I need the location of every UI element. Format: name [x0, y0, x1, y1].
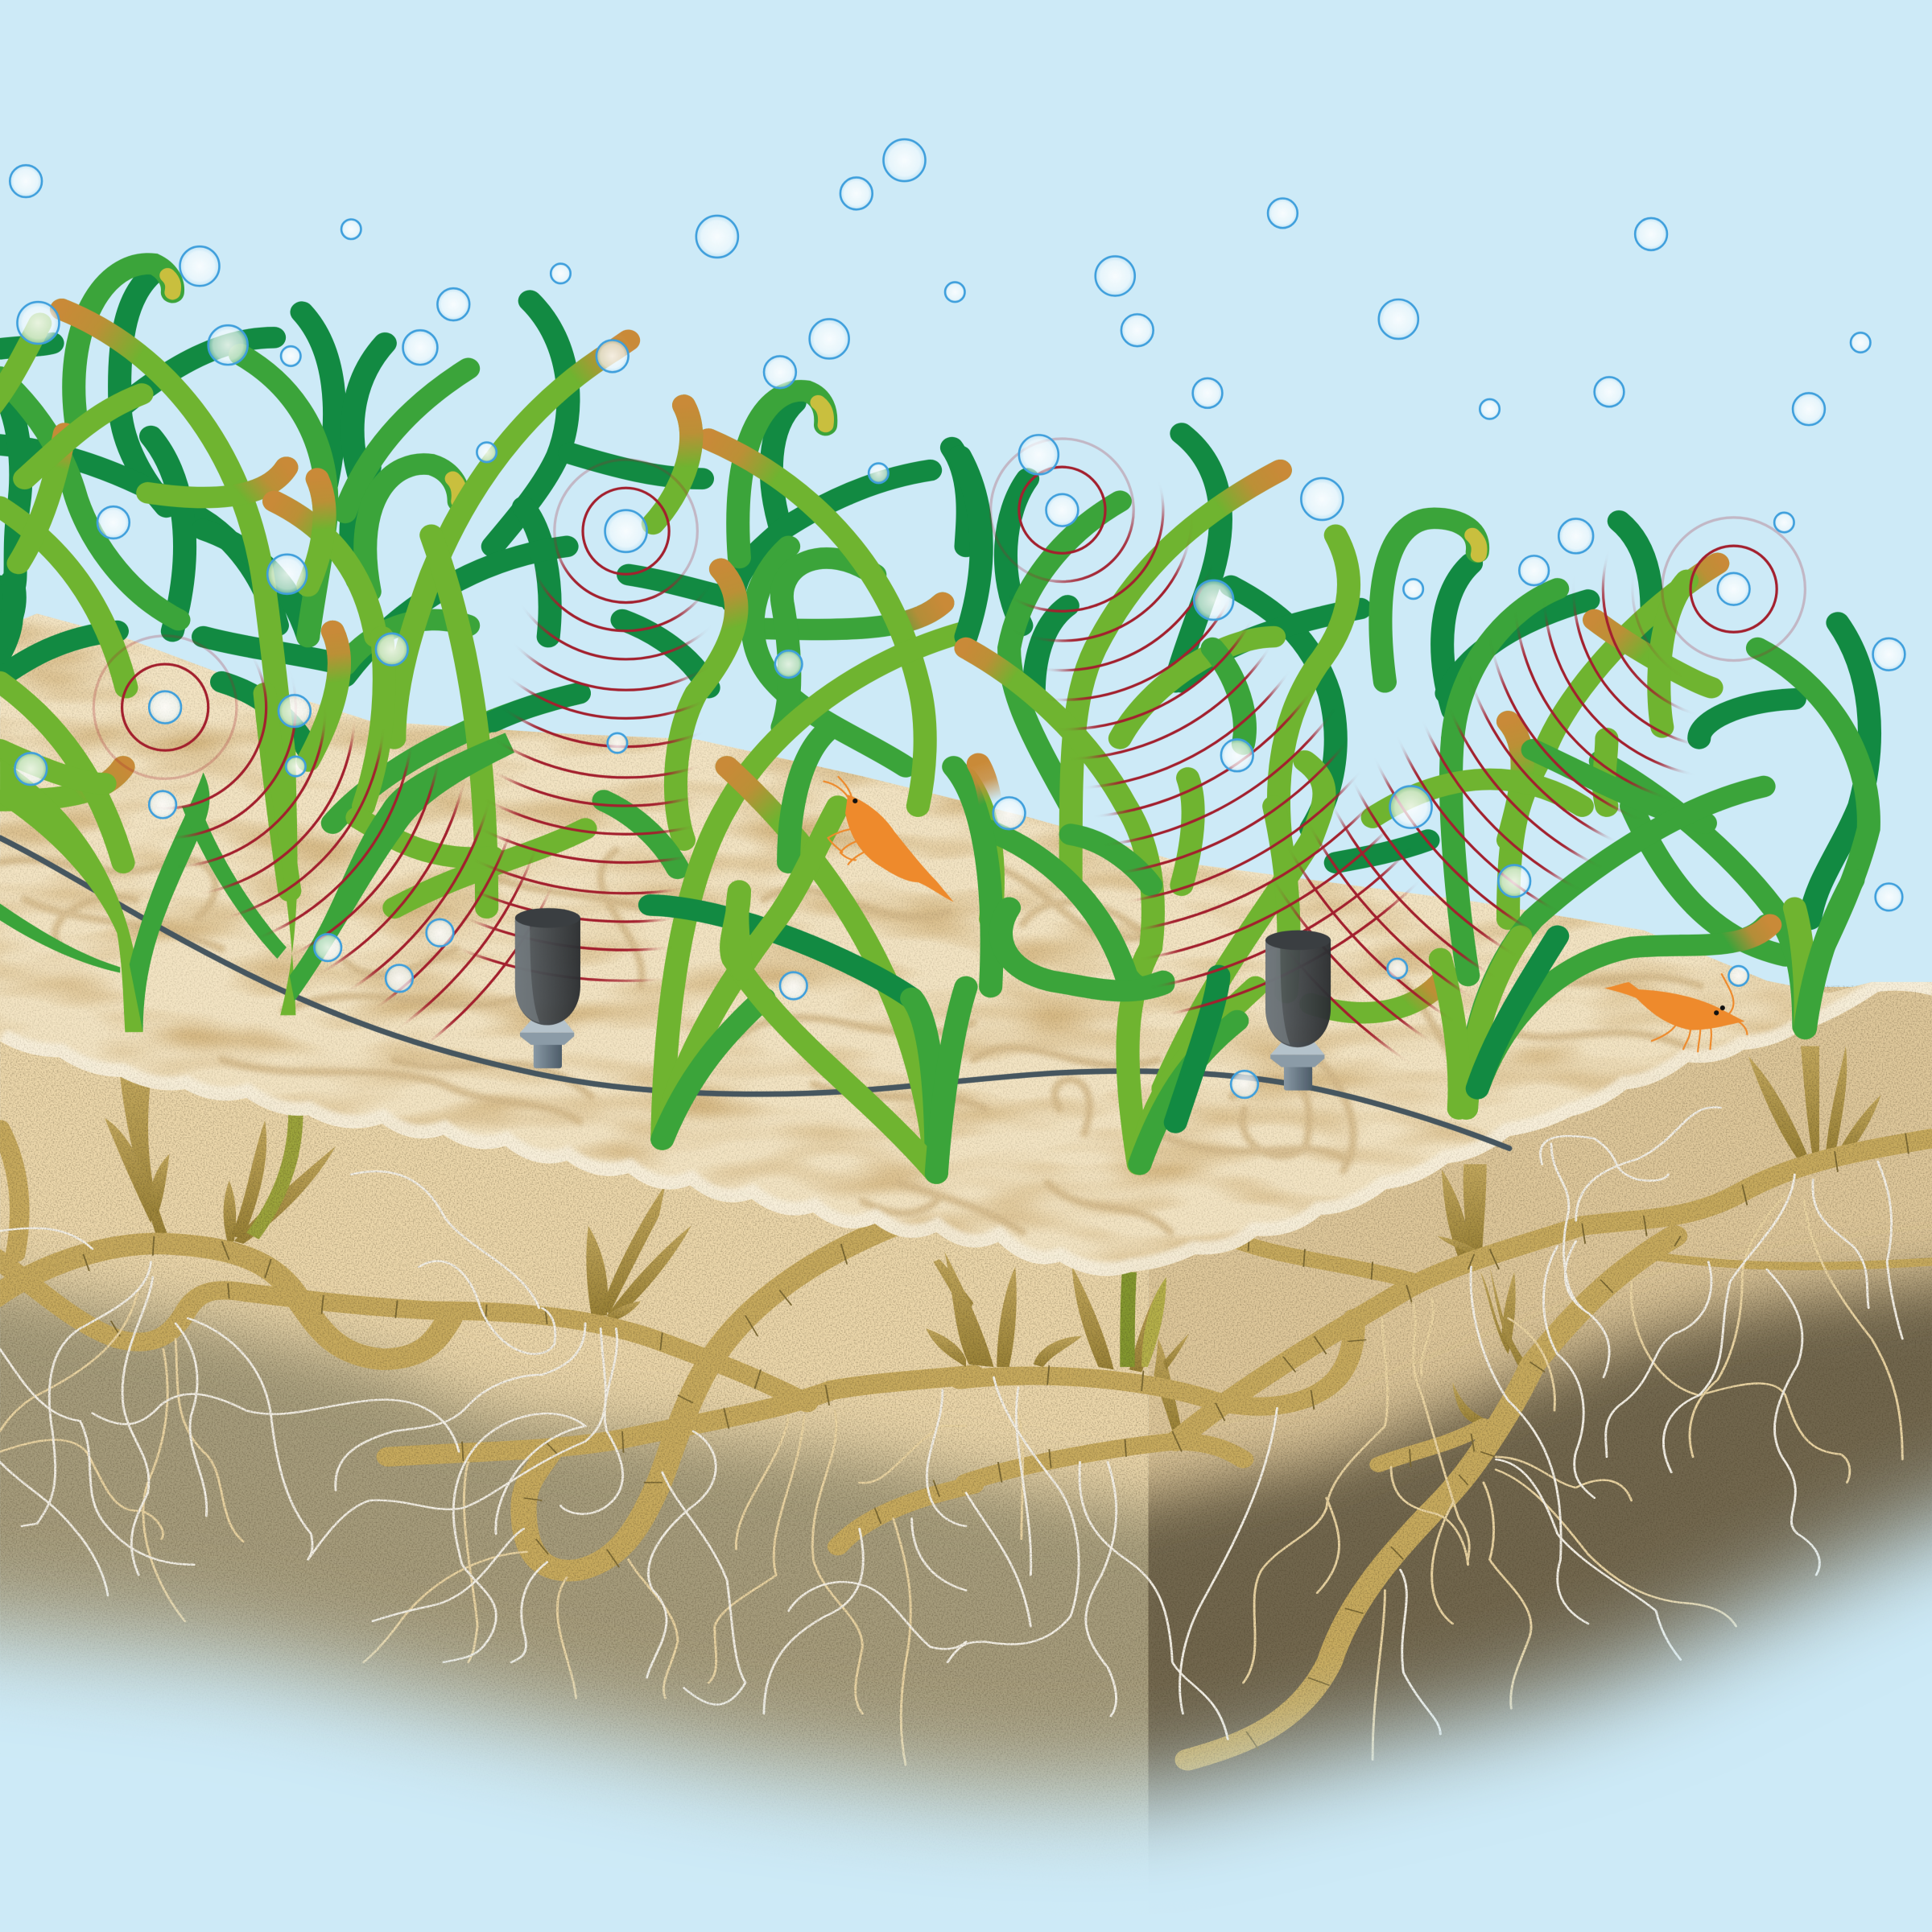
speaker 1 — [515, 908, 580, 1068]
irrigation hose — [0, 838, 1509, 1149]
sound waves: speaker to upper target — [176, 81, 1075, 980]
soil grain texture — [0, 985, 1932, 1932]
sand ripples and shadows — [0, 850, 1700, 1232]
pale green leaf — [1141, 1278, 1166, 1367]
sound waves: speaker to target near left shoot — [0, 281, 592, 1133]
rhizomes, shoots and roots: right side — [926, 1046, 1932, 1760]
rhizome node marks — [998, 1133, 1909, 1749]
shrimp 2 — [1604, 973, 1747, 1052]
left sediment block — [0, 865, 1148, 1863]
green stem — [1128, 1272, 1129, 1367]
sound waves: second speaker to middle target — [547, 0, 1577, 1025]
rhizome node marks — [83, 1236, 939, 1567]
rhizome stubs at far left — [0, 1129, 19, 1254]
speaker 2 — [1265, 931, 1331, 1091]
right darker sediment block — [1148, 987, 1932, 1866]
sand grain texture — [0, 592, 1932, 1294]
main rhizomes — [0, 1257, 807, 1403]
sound waves: second speaker to right target — [1159, 14, 1932, 1163]
crown 1 — [0, 758, 143, 1032]
hair roots — [947, 1107, 1902, 1760]
panel: sediment cross-section with roots, fading into water — [0, 862, 1932, 1932]
dappled light on sand — [0, 592, 1932, 1294]
brown shoots — [926, 1046, 1880, 1431]
air bubbles — [10, 139, 1905, 1098]
brown shoots — [105, 1077, 973, 1321]
green stem — [253, 1113, 295, 1236]
hair roots — [0, 1171, 966, 1765]
panel: sand surface — [0, 592, 1932, 1294]
shrimp 1 — [823, 776, 954, 902]
crown 3 — [663, 631, 968, 1139]
rhizomes, shoots and roots: left side — [0, 1077, 973, 1765]
pale lip of the sand edge — [0, 991, 1932, 1276]
seagrass: left half — [0, 264, 968, 1173]
rhizomes — [1231, 1239, 1410, 1280]
crown 2 — [265, 749, 297, 1015]
seagrass: right half — [954, 434, 1869, 1164]
